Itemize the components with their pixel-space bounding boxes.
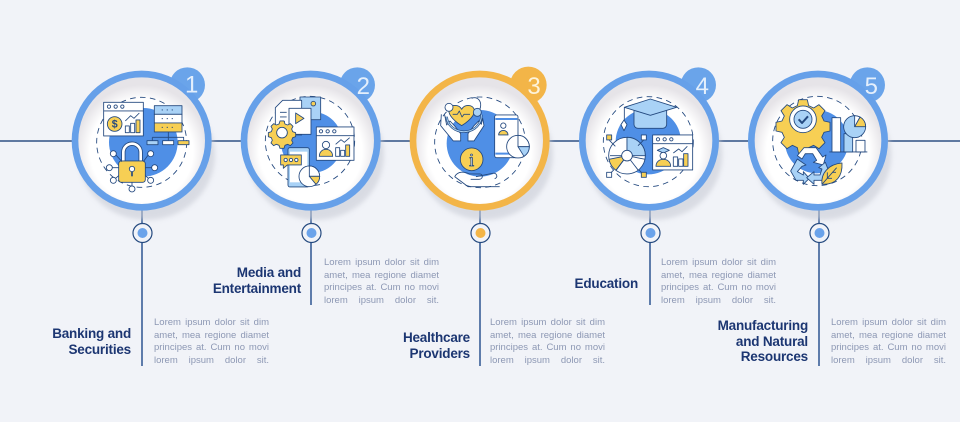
icon: manufacturing bbox=[773, 96, 867, 186]
text: banking: principes at. Cum no movi bbox=[154, 342, 269, 353]
heading: banking bbox=[52, 326, 131, 357]
heading: banking: Securities bbox=[68, 342, 131, 357]
ring 5 bbox=[748, 67, 891, 220]
heading: manufacturing: Resources bbox=[741, 349, 808, 364]
text: media: principes at. Cum no movi bbox=[324, 282, 439, 293]
number 2: 2 bbox=[357, 73, 370, 100]
text: banking: lorem ipsum dolor sit. bbox=[154, 355, 269, 366]
text: healthcare: Lorem ipsum dolor sit dim bbox=[490, 317, 605, 328]
ring 3 bbox=[410, 67, 553, 220]
heading: manufacturing bbox=[718, 318, 808, 364]
panel 1 circle: banking bbox=[72, 67, 215, 366]
connector 1 bbox=[133, 210, 152, 366]
connector 5 bbox=[810, 210, 829, 366]
text: healthcare: lorem ipsum dolor sit. bbox=[490, 355, 605, 366]
text: education: amet, mea regione diamet bbox=[661, 270, 776, 281]
text: education: principes at. Cum no movi bbox=[661, 282, 776, 293]
connector 4 bbox=[641, 210, 660, 305]
text: education: Lorem ipsum dolor sit dim bbox=[661, 257, 776, 268]
number 4: 4 bbox=[696, 73, 709, 100]
connector 2 bbox=[302, 210, 321, 305]
text: healthcare bbox=[490, 317, 605, 366]
text: manufacturing: lorem ipsum dolor sit. bbox=[831, 355, 946, 366]
text: manufacturing: amet, mea regione diamet bbox=[831, 330, 946, 341]
icon: education bbox=[603, 97, 693, 187]
number 3: 3 bbox=[527, 73, 541, 100]
icon: bank security: $ bbox=[112, 119, 118, 131]
panel 4 circle: education bbox=[579, 67, 722, 305]
text: media: Lorem ipsum dolor sit dim bbox=[324, 257, 439, 268]
number 5: 5 bbox=[865, 73, 878, 100]
heading: media bbox=[213, 265, 302, 296]
icon: media bbox=[265, 96, 355, 187]
ring 4 bbox=[579, 67, 722, 220]
ring 1 bbox=[72, 67, 215, 220]
text: banking: amet, mea regione diamet bbox=[154, 330, 269, 341]
heading: media: Media and bbox=[237, 265, 301, 280]
panel 5 circle: manufacturing bbox=[748, 67, 891, 366]
text: healthcare: amet, mea regione diamet bbox=[490, 330, 605, 341]
text: healthcare: principes at. Cum no movi bbox=[490, 342, 605, 353]
number 1: 1 bbox=[185, 71, 198, 98]
text: manufacturing bbox=[831, 317, 946, 366]
connector 3 bbox=[471, 210, 490, 366]
text: media bbox=[324, 257, 439, 306]
panel 2 circle: media bbox=[241, 67, 384, 305]
icon: healthcare bbox=[435, 97, 529, 188]
heading: healthcare: Providers bbox=[410, 346, 470, 361]
heading: education: Education bbox=[575, 276, 638, 291]
text: media: amet, mea regione diamet bbox=[324, 270, 439, 281]
text: manufacturing: Lorem ipsum dolor sit dim bbox=[831, 317, 946, 328]
text: manufacturing: principes at. Cum no movi bbox=[831, 342, 946, 353]
heading: manufacturing: and Natural bbox=[736, 334, 808, 349]
text: education bbox=[661, 257, 776, 306]
text: banking bbox=[154, 317, 269, 366]
heading: healthcare bbox=[403, 330, 470, 361]
text: education: lorem ipsum dolor sit. bbox=[661, 295, 776, 306]
panel 3 circle: healthcare bbox=[410, 67, 553, 366]
heading: healthcare: Healthcare bbox=[403, 330, 470, 345]
heading: manufacturing: Manufacturing bbox=[718, 318, 808, 333]
text: media: lorem ipsum dolor sit. bbox=[324, 295, 439, 306]
ring 2 bbox=[241, 67, 384, 220]
icon: bank security bbox=[97, 97, 189, 192]
icon: healthcare: i bbox=[469, 150, 474, 170]
heading: media: Entertainment bbox=[213, 281, 301, 296]
timeline line bbox=[0, 140, 960, 142]
heading: banking: Banking and bbox=[52, 326, 131, 341]
text: banking: Lorem ipsum dolor sit dim bbox=[154, 317, 269, 328]
